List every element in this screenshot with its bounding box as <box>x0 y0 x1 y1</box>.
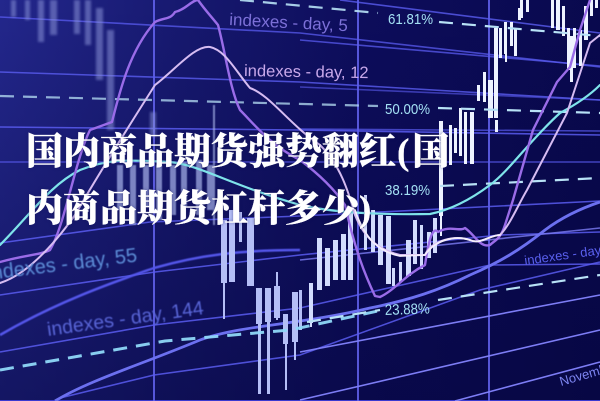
label: indexes day 12: indexes - day, 12 <box>244 62 369 82</box>
label: 23.88%: 23.88% <box>385 300 430 319</box>
long-term index curve <box>0 250 300 335</box>
blurred candlesticks under title <box>117 105 215 225</box>
title <box>26 130 450 230</box>
blurred candlesticks, upper left <box>11 0 156 137</box>
label: 38.19%: 38.19% <box>385 182 430 199</box>
candlesticks, centre <box>221 210 302 394</box>
moving average curves <box>0 0 600 297</box>
label: indexes day 144: indexes - day, 144 <box>46 297 205 341</box>
label: 50.00%: 50.00% <box>385 101 430 118</box>
candlesticks, upper right <box>439 0 598 236</box>
title: 内商品期货杠杆多少) <box>26 189 371 230</box>
candlesticks, right of centre <box>309 195 437 327</box>
title: 国内商品期货强势翻红(国 <box>26 132 449 173</box>
label: indexes day 5: indexes - day, 5 <box>229 10 348 35</box>
label: 61.81%: 61.81% <box>388 11 433 28</box>
